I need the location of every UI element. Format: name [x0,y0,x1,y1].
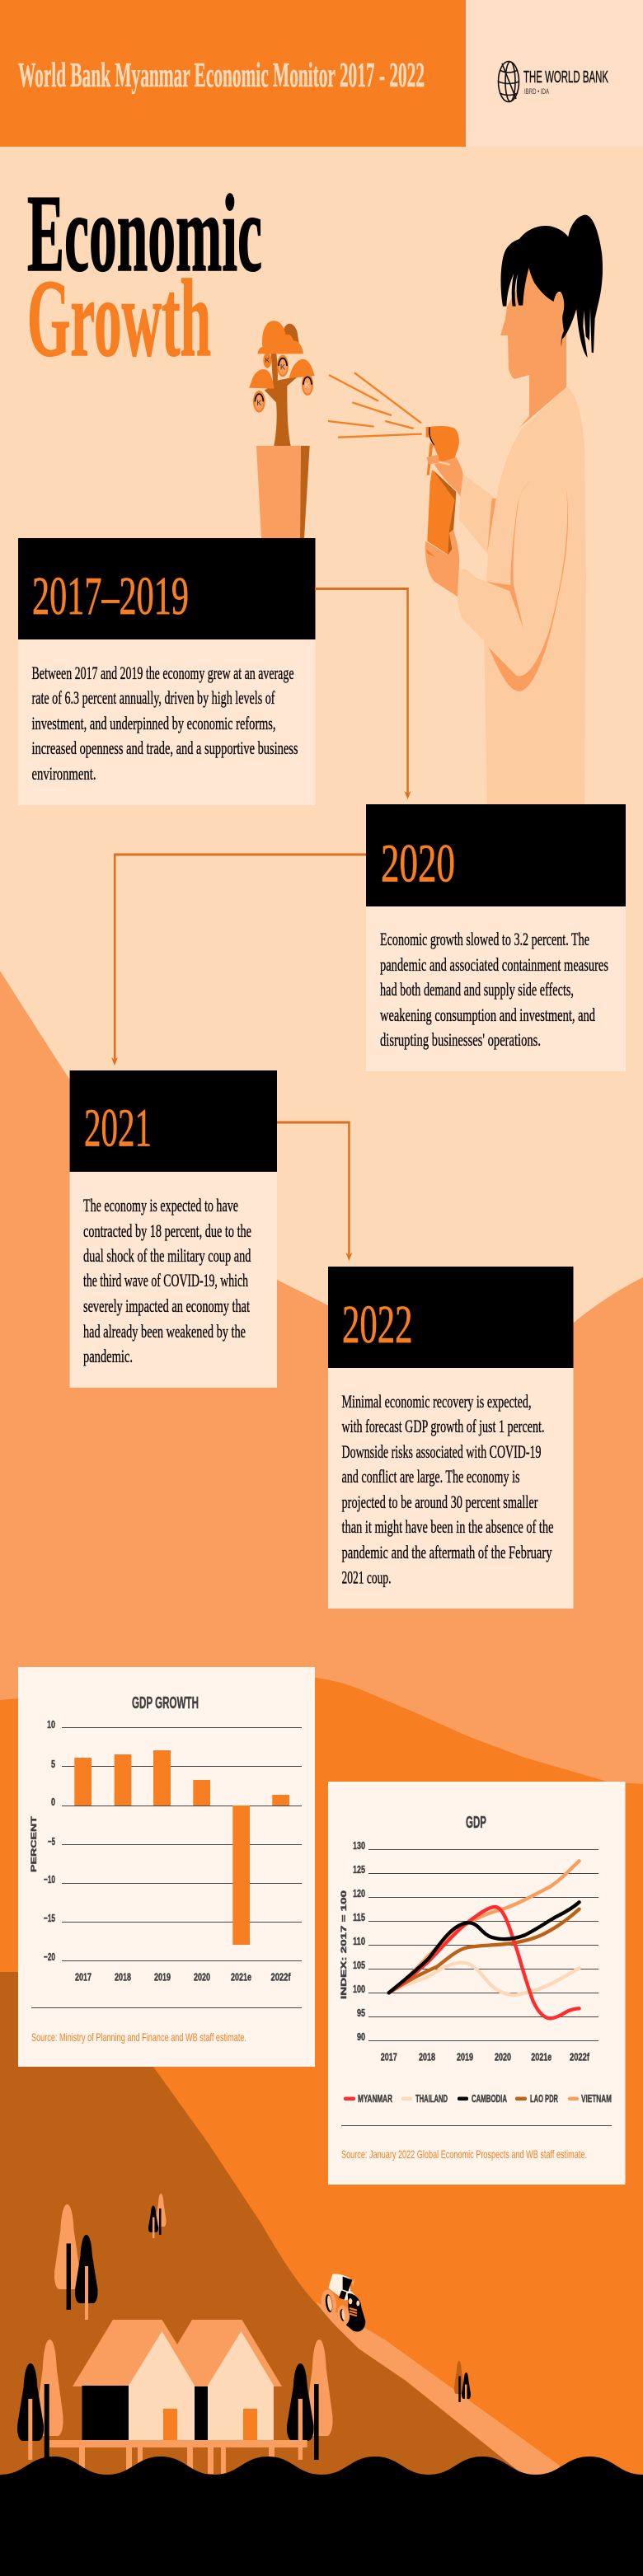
legend: THAILAND [415,2092,448,2105]
x axis labels: 2021e [531,2051,551,2063]
road on hillside [316,2302,560,2480]
illustration: tractor [320,2274,365,2332]
body text: projected to be around 30 percent smaller [341,1492,538,1512]
illustration: trees on road [454,2361,471,2405]
y axis labels: −20 [44,1951,55,1963]
legend: MYANMAR [358,2092,392,2105]
y axis labels: 125 [353,1863,365,1876]
y axis labels: 95 [357,2007,365,2019]
World Bank logo [466,0,643,147]
arrow: 2020 to 2021 [111,854,366,1066]
y axis labels: 110 [353,1935,365,1947]
x axis labels: 2018 [115,1971,131,1983]
body text: dual shock of the military coup and [83,1245,251,1266]
y axis labels: 105 [353,1959,365,1971]
body text: had already been weakened by the [83,1321,246,1342]
doors [163,2409,177,2440]
gridlines [341,1849,612,2126]
y axis labels [353,1839,365,2043]
body text: rate of 6.3 percent annually, driven by high levels of [31,687,275,708]
body text: Minimal economic recovery is expected, [341,1391,531,1412]
body text: and conflict are large. The economy is [341,1466,519,1487]
x axis labels: 2019 [457,2051,473,2063]
source note: Source: Ministry of Planning and Finance and WB staff estimate. [31,2030,246,2044]
legend: LAO PDR [530,2092,558,2105]
y axis labels: −5 [48,1835,55,1848]
platform [49,2440,307,2447]
panel: GDP index line chart [328,1782,625,2185]
main title [27,172,262,379]
y axis labels [44,1718,55,1963]
panel: GDP growth bar chart [18,1667,315,2067]
background hills [0,971,643,2480]
title second line: Growth [27,257,211,379]
main title: Economic [27,172,262,294]
year heading: 2020 [381,834,455,893]
illustration: hand holding spray bottle [425,426,463,597]
x axis labels: 2020 [194,1971,210,1983]
x axis labels: 2022f [570,2051,589,2063]
body text: increased openness and trade, and a supportive business [31,738,298,758]
illustration: woman's torso and arm [458,268,586,805]
x axis labels: 2019 [154,1971,171,1983]
body text: disrupting businesses' operations. [380,1029,541,1050]
y axis labels: 115 [353,1911,365,1923]
y axis title: INDEX: 2017 = 100 [340,1890,348,1999]
y axis labels: 120 [353,1887,365,1899]
x axis labels: 2018 [419,2051,435,2063]
x axis labels [381,2051,589,2063]
x axis labels [75,1971,291,1983]
y axis labels: 10 [47,1718,55,1731]
illustration: trees on hill [54,2194,167,2320]
icon: water spray lines [328,372,422,438]
x axis labels: 2020 [495,2051,511,2063]
panel: 2020 [366,804,626,1071]
data lines [389,1861,580,2018]
panel: 2022 [328,1267,574,1609]
y axis labels: 130 [353,1839,365,1852]
header band [0,0,466,147]
illustration: potted money tree: K [305,382,311,391]
roofs [73,2320,282,2386]
chart title: GDP [466,1814,486,1832]
year heading: 2021 [84,1098,152,1159]
body text: investment, and underpinned by economic reforms, [31,713,275,733]
body text [31,663,298,784]
x axis labels: 2017 [381,2051,397,2063]
black wave footer [0,2457,643,2576]
illustration: potted money tree: K [256,399,262,407]
logo sub-line: IBRD • IDA [524,87,549,96]
stilts [79,2447,275,2474]
panel: 2021 [70,1070,277,1388]
y axis labels: 0 [51,1796,55,1808]
body text: The economy is expected to have [83,1195,238,1215]
walls [82,2386,129,2440]
arrow: 2021 to 2022 [277,1121,352,1261]
chart title: GDP GROWTH [132,1694,199,1712]
body text: contracted by 18 percent, due to the [83,1220,251,1241]
x axis labels: 2022f [270,1971,291,1983]
icon: globe [498,61,519,102]
y axis labels: 90 [357,2030,365,2043]
y axis title: PERCENT [30,1815,38,1872]
illustration: potted money tree: K [265,357,270,364]
illustration: woman's head and hair [501,215,603,358]
body text: Between 2017 and 2019 the economy grew at an average [31,663,293,683]
gridlines [31,1727,302,2007]
body text [341,1391,554,1587]
body text: the third wave of COVID-19, which [83,1270,248,1290]
body text: 2021 coup. [341,1567,391,1587]
legend [344,2092,612,2105]
body text [380,929,608,1050]
year heading: 2017–2019 [32,566,189,626]
body text: pandemic. [83,1346,133,1366]
y axis labels: 5 [51,1758,55,1770]
x axis labels: 2017 [75,1971,92,1983]
body text [83,1195,251,1366]
body text: severely impacted an economy that [83,1295,250,1316]
y axis labels: 100 [353,1983,365,1995]
year heading: 2022 [342,1295,412,1355]
x axis labels: 2021e [231,1971,251,1983]
y axis labels: −10 [44,1873,55,1885]
legend: CAMBODIA [472,2092,507,2105]
legend: VIETNAM [581,2092,612,2105]
bars [74,1750,289,1945]
body text: environment. [31,763,96,784]
panel: 2017–2019 [18,538,315,805]
y axis labels: −15 [44,1912,55,1924]
arrow: 2017–2019 to 2020 [315,588,411,799]
illustration: potted money tree: K [280,363,286,372]
illustration: stilt houses [49,2320,307,2474]
illustration: potted money tree [249,321,315,538]
illustration: trees beside houses [17,2339,333,2460]
